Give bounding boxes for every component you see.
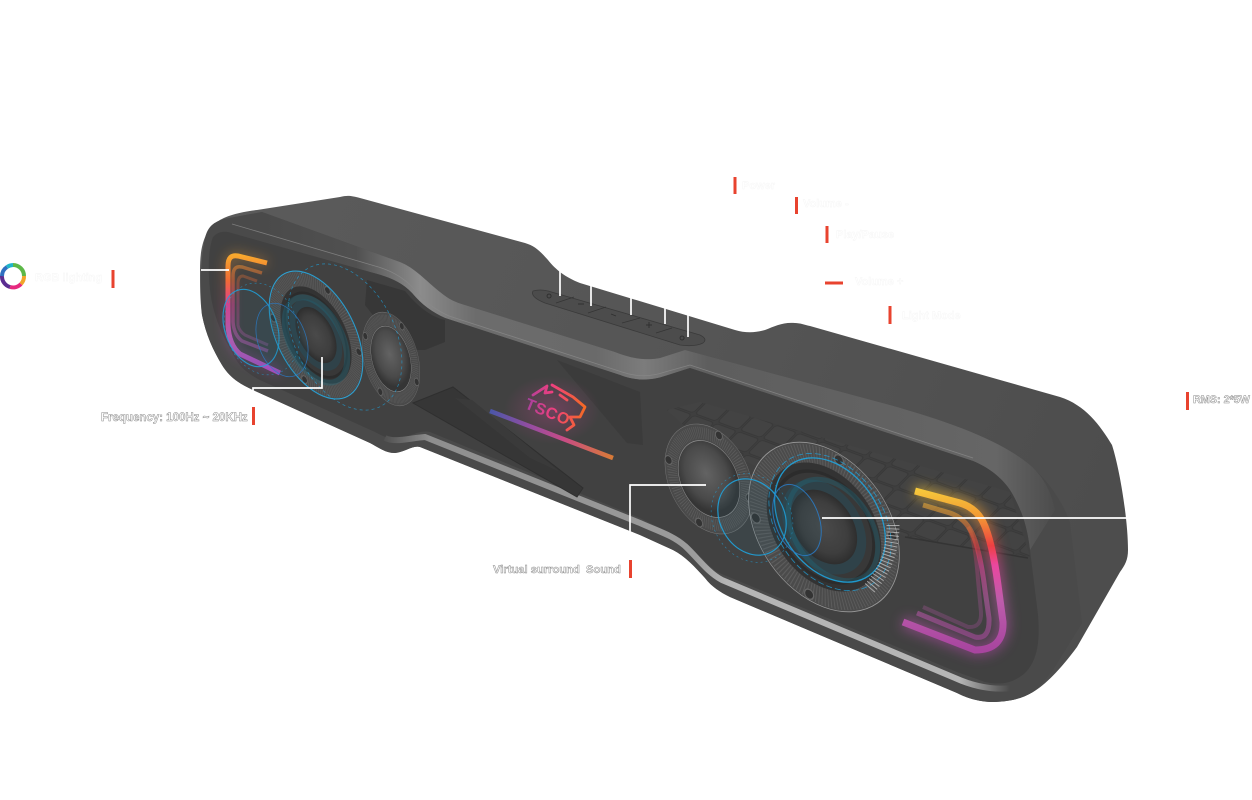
label: play pause <box>826 226 894 243</box>
left light glow <box>228 256 280 373</box>
speaker body <box>200 196 1128 702</box>
left light strip inner <box>233 267 268 351</box>
label: power: Power <box>742 180 776 192</box>
label: RGB lighting: RGB lighting <box>35 272 102 284</box>
label: volume down <box>795 197 849 214</box>
right light strip inner <box>917 505 989 637</box>
highlight line on band <box>232 224 973 458</box>
left tweeter <box>352 306 430 412</box>
control strip <box>532 290 705 346</box>
label: RMS <box>1186 392 1251 410</box>
left light strip inner 2 <box>238 276 268 345</box>
label: volume up <box>825 276 903 288</box>
left blue rings <box>212 245 425 429</box>
right blue rings <box>695 430 916 614</box>
lower dark trapezoid vent <box>413 387 583 497</box>
label: volume up: Volume + <box>855 276 903 288</box>
centre wedge <box>557 360 643 445</box>
left woofer <box>250 256 382 414</box>
label: frequency: Frequency: 100Hz ~ 20KHz <box>101 412 248 424</box>
grille tiles <box>667 402 1030 557</box>
label: RMS: RMS: 2*5W <box>1193 394 1251 406</box>
logo lion head <box>533 385 585 430</box>
body silhouette <box>200 196 1128 702</box>
silver trim strip <box>385 437 1012 689</box>
left light strip main <box>228 256 280 373</box>
right light glow <box>903 491 1003 650</box>
front recess <box>209 232 1039 683</box>
callout lines <box>201 270 1128 534</box>
label: RGB lighting <box>35 270 114 288</box>
logo text: TSCO <box>523 396 572 429</box>
right light strip inner 2 <box>923 527 981 627</box>
label: virtual surround: Virtual surround Sound <box>493 564 621 576</box>
label: play pause: Play/Pause <box>836 229 894 241</box>
label: light mode <box>888 306 961 324</box>
shoulder band <box>224 212 1055 550</box>
label: volume down: Volume - <box>803 198 849 210</box>
gradient light bar <box>490 411 613 458</box>
label: light mode: Light Mode <box>902 310 961 322</box>
right woofer <box>717 414 931 640</box>
icon: colour ring <box>2 265 24 287</box>
label: power <box>734 177 776 194</box>
right light strip main <box>903 491 1003 650</box>
vent inner shade <box>455 398 560 472</box>
label: virtual surround <box>493 560 632 578</box>
front frame <box>201 212 1082 702</box>
right tweeter <box>648 409 770 549</box>
bright ticks on right woofer <box>868 525 893 590</box>
dark opening behind left tweeter <box>365 280 445 350</box>
label: frequency <box>101 407 255 425</box>
logo glow <box>504 376 600 444</box>
